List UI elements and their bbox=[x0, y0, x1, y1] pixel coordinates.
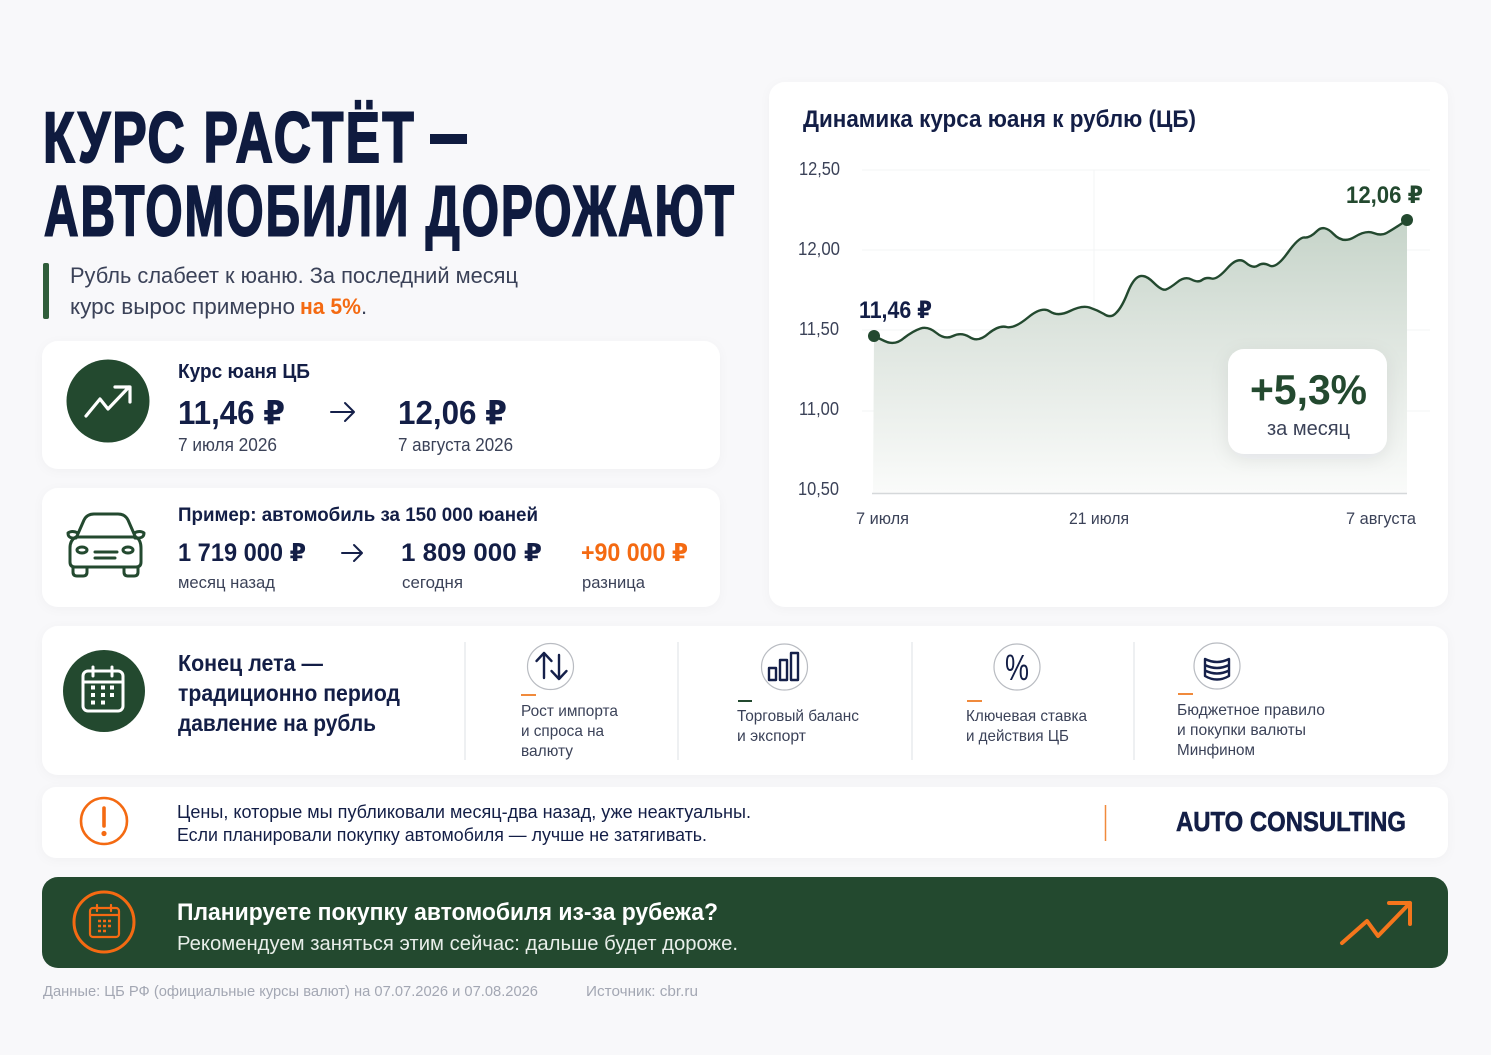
rate on 7 July bbox=[178, 394, 285, 455]
warning text: Цены, которые мы публиковали месяц-два назад, уже неактуальны. bbox=[177, 802, 751, 822]
x axis labels: 21 июля bbox=[1069, 509, 1129, 528]
icon: exclamation bbox=[81, 798, 127, 844]
factor: key rate: и действия ЦБ bbox=[966, 728, 1069, 745]
callout: monthly change: за месяц bbox=[1267, 418, 1350, 440]
panel: call to action bbox=[42, 877, 1448, 968]
title: — bbox=[430, 76, 467, 188]
y axis labels: 12,50 bbox=[799, 159, 840, 179]
call to action text: Планируете покупку автомобиля из-за рубежа? bbox=[177, 899, 718, 926]
factor: budget rule: Бюджетное правило bbox=[1177, 702, 1325, 719]
rate on 7 August bbox=[398, 394, 513, 455]
factor: key rate: Ключевая ставка bbox=[966, 708, 1087, 725]
chart heading: Динамика курса юаня к рублю (ЦБ) bbox=[803, 106, 1196, 133]
factor: import demand: и спроса на bbox=[521, 723, 604, 740]
factor: trade balance: и экспорт bbox=[737, 728, 807, 745]
subtitle: курс вырос примерно bbox=[70, 294, 295, 319]
rate on 7 July: 7 июля 2026 bbox=[178, 435, 277, 455]
heading: end of summer: традиционно период bbox=[178, 680, 400, 706]
panel: car example bbox=[42, 488, 720, 607]
panel: exchange rate bbox=[42, 341, 720, 469]
subtitle bbox=[43, 263, 518, 319]
footer sources: Источник: cbr.ru bbox=[586, 983, 698, 1000]
heading: end of summer: давление на рубль bbox=[178, 710, 376, 736]
warning text bbox=[177, 802, 751, 845]
subtitle: на 5% bbox=[300, 294, 361, 319]
rate on 7 July: 11,46 ₽ bbox=[178, 394, 285, 431]
price today: сегодня bbox=[402, 573, 463, 592]
x axis labels: 7 августа bbox=[1346, 509, 1417, 528]
start point bbox=[859, 297, 932, 342]
title: АВТОМОБИЛИ ДОРОЖАЮТ bbox=[44, 172, 736, 252]
rate on 7 August: 12,06 ₽ bbox=[398, 394, 507, 431]
y axis labels bbox=[798, 159, 840, 499]
y axis labels: 11,00 bbox=[799, 399, 839, 419]
heading: yuan rate: Курс юаня ЦБ bbox=[178, 361, 310, 383]
call to action text bbox=[177, 899, 738, 955]
end point: 12,06 ₽ bbox=[1346, 182, 1423, 209]
price a month ago bbox=[178, 539, 306, 592]
price difference: +90 000 ₽ bbox=[581, 539, 688, 567]
area under the curve bbox=[873, 220, 1407, 493]
callout: monthly change: +5,3% bbox=[1250, 366, 1367, 413]
title: КУРС РАСТЁТ bbox=[43, 99, 416, 178]
callout: monthly change bbox=[1228, 349, 1387, 454]
factor: import demand bbox=[521, 644, 618, 760]
factor: budget rule: и покупки валюты bbox=[1177, 722, 1306, 739]
factor: import demand: валюту bbox=[521, 743, 573, 760]
price a month ago: месяц назад bbox=[178, 573, 275, 592]
heading: end of summer bbox=[178, 650, 400, 736]
factor: budget rule bbox=[1177, 643, 1325, 759]
price today bbox=[401, 539, 542, 592]
rate on 7 August: 7 августа 2026 bbox=[398, 435, 513, 455]
heading: example: Пример: автомобиль за 150 000 юаней bbox=[178, 504, 538, 526]
factor: trade balance: Торговый баланс bbox=[737, 708, 859, 725]
subtitle: . bbox=[361, 294, 367, 319]
title bbox=[43, 76, 736, 252]
panel: end of summer factors bbox=[42, 626, 1448, 775]
y axis labels: 10,50 bbox=[798, 479, 839, 499]
factor: budget rule: Минфином bbox=[1177, 742, 1255, 759]
call to action text: Рекомендуем заняться этим сейчас: дальше будет дороже. bbox=[177, 933, 738, 955]
icon: orange calendar bbox=[74, 892, 134, 952]
icon: orange trend arrow bbox=[1342, 903, 1410, 943]
price a month ago: 1 719 000 ₽ bbox=[178, 539, 306, 567]
icon: car bbox=[68, 514, 144, 576]
panel: chart bbox=[769, 82, 1448, 607]
icon: calendar bbox=[63, 650, 145, 732]
x axis labels bbox=[856, 509, 1417, 528]
price difference bbox=[581, 539, 688, 592]
price today: 1 809 000 ₽ bbox=[401, 539, 542, 567]
x axis labels: 7 июля bbox=[856, 509, 909, 528]
y axis labels: 12,00 bbox=[798, 239, 840, 259]
panel: warning bbox=[42, 787, 1448, 858]
factor: import demand: Рост импорта bbox=[521, 703, 618, 720]
end point bbox=[1346, 182, 1423, 226]
factor: key rate bbox=[966, 644, 1087, 745]
rate line bbox=[874, 220, 1407, 343]
subtitle: Рубль слабеет к юаню. За последний месяц bbox=[70, 263, 518, 288]
arrow bbox=[342, 545, 362, 561]
icon: trend up bbox=[66, 360, 150, 442]
footer sources: Данные: ЦБ РФ (официальные курсы валют) на 07.07.2026 и 07.08.2026 bbox=[43, 983, 538, 1000]
brand: AUTO CONSULTING bbox=[1176, 806, 1406, 837]
factor: trade balance bbox=[737, 644, 859, 745]
start point: 11,46 ₽ bbox=[859, 297, 932, 324]
factor: key rate: % bbox=[1005, 647, 1029, 688]
arrow bbox=[331, 403, 354, 421]
heading: end of summer: Конец лета — bbox=[178, 650, 323, 676]
price difference: разница bbox=[582, 573, 646, 592]
y axis labels: 11,50 bbox=[799, 319, 839, 339]
warning text: Если планировали покупку автомобиля — лучше не затягивать. bbox=[177, 825, 707, 845]
